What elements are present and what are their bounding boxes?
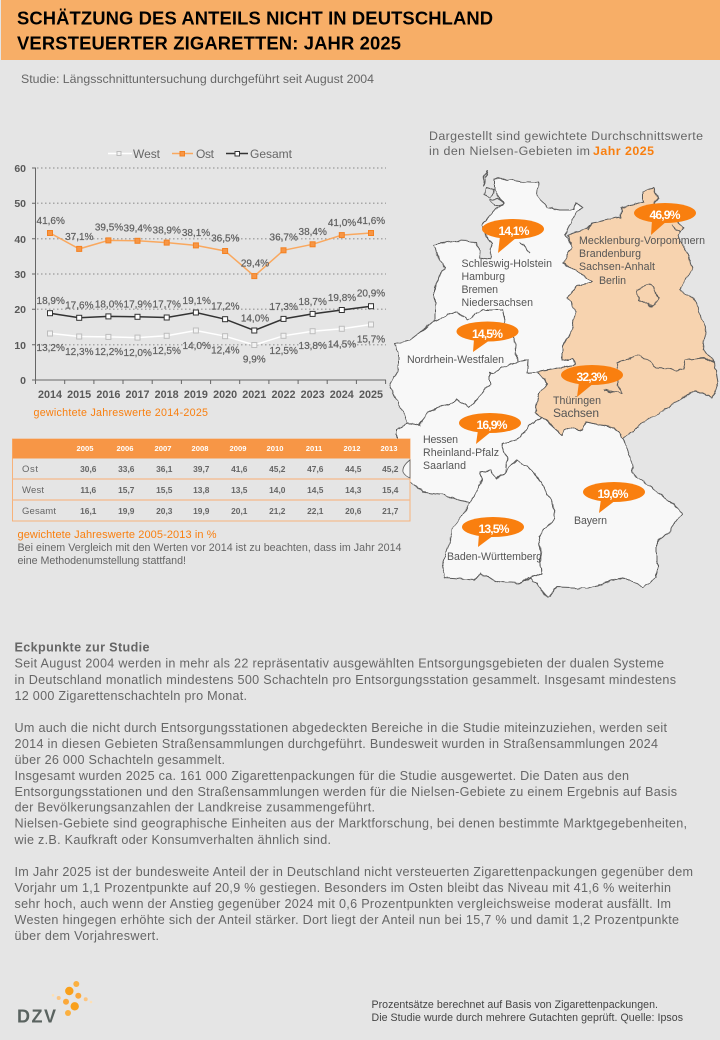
chart axes: 40: [14, 234, 26, 246]
chart axes: 60: [14, 163, 26, 175]
data labels: 20,9%: [357, 289, 385, 300]
data labels: 18,0%: [95, 300, 123, 311]
key points text block: Nielsen-Gebiete sind geographische Einheiten aus der Marktforschung, bei denen bestimmte Marktgegebenheiten,: [14, 817, 687, 831]
chart axes: 0: [20, 375, 26, 387]
title banner: SCHÄTZUNG DES ANTEILS NICHT IN DEUTSCHLAND: [17, 8, 493, 28]
table row: Gesamt: [22, 506, 399, 517]
data labels: 38,9%: [153, 225, 181, 236]
DZV logo: DZV: [17, 1006, 56, 1026]
data labels: 41,6%: [357, 216, 385, 227]
table row: West: [22, 485, 399, 496]
key points text block: Vorjahr um 1,1 Prozentpunkte auf 20,9 % gestiegen. Besonders im Osten bleibt das Niveau mit 41,6 % weiterhin: [14, 881, 671, 895]
table caption and note: [18, 529, 402, 567]
table header: 2010: [267, 444, 283, 453]
table row: Ost: 41,6: [231, 464, 248, 474]
map heading: [429, 129, 703, 158]
key points text block: in Deutschland monatlich mindestens 500 Schachteln pro Entsorgungsstation gesammelt. Insgesamt mindestens: [14, 673, 676, 687]
table row: West: 11,6: [80, 485, 97, 495]
data labels: 39,5%: [95, 223, 123, 234]
chart caption: gewichtete Jahreswerte 2014-2025: [34, 407, 208, 419]
key points text block: über 26 000 Schachteln gesammelt.: [14, 753, 225, 767]
title banner: VERSTEUERTER ZIGARETTEN: JAHR 2025: [17, 32, 401, 54]
callout: 14,1 %: [482, 219, 544, 253]
key points text block: sehr hoch, auch wenn der Anstieg gegenüber 2024 mit 0,6 Prozentpunkten vergleichsweise moderat ausfällt. Im: [14, 897, 671, 911]
table row: Ost: 45,2: [382, 464, 399, 474]
region: Baden-Württemberg: [442, 460, 555, 583]
data labels: 17,3%: [270, 302, 298, 313]
chart legend: [108, 147, 293, 161]
key points text block: Eckpunkte zur Studie: [14, 641, 150, 655]
key points text block: Seit August 2004 werden in mehr als 22 repräsentativ ausgewählten Entsorgungsgebieten der dualen Systeme: [14, 657, 664, 671]
table row: Gesamt: Gesamt: [22, 506, 56, 517]
data labels: 14,5%: [328, 339, 356, 350]
series: West: [48, 322, 374, 348]
table row: Gesamt: 21,7: [382, 506, 399, 516]
callout: 14,5 %: [456, 322, 518, 352]
data labels: 19,8%: [328, 293, 356, 304]
data labels: 17,7%: [153, 300, 181, 311]
table header: 2008: [192, 444, 208, 453]
table row: Ost: Ost: [22, 464, 38, 475]
callout: 13,5 %: 13,5%: [478, 522, 510, 536]
key points text block: 2014 in diesen Gebieten Straßensammlungen durchgeführt. Bundesweit wurden in Straßensammlungen 2024: [14, 737, 658, 751]
chart axes: 2015: [67, 389, 91, 401]
table header: 2007: [155, 444, 171, 453]
table row: Ost: 30,6: [80, 464, 97, 474]
callout: 46,9 %: 46,9%: [650, 208, 681, 222]
subtitle: Studie: Längsschnittuntersuchung durchgeführt seit August 2004: [21, 72, 374, 86]
data labels: 9,9%: [243, 355, 266, 366]
callout: 46,9 %: [634, 203, 696, 235]
data labels: 17,6%: [65, 301, 94, 312]
series: Gesamt: [48, 304, 374, 333]
chart axes: 2024: [330, 389, 354, 401]
chart legend: Gesamt: [250, 147, 293, 161]
data labels: [37, 216, 385, 366]
table header: 2005: [77, 444, 94, 453]
table row: Gesamt: 20,6: [345, 506, 362, 516]
table row: West: 13,5: [231, 485, 248, 495]
callout: 16,9 %: 16,9%: [476, 418, 508, 432]
data labels: 17,2%: [211, 302, 240, 313]
key points text block: über dem Vorjahreswert.: [14, 929, 159, 943]
data labels: 12,5%: [270, 346, 298, 357]
table row: Ost: 33,6: [118, 464, 135, 474]
data labels: 12,3%: [65, 347, 94, 358]
map region labels: Sachsen: [553, 406, 599, 420]
data labels: 38,1%: [182, 228, 210, 239]
region: Nordrhein-Westfalen: [390, 310, 517, 425]
table row: West: 13,8: [193, 485, 210, 495]
table row: Gesamt: 20,3: [156, 506, 173, 516]
region: Hessen, Rheinland-Pfalz, Saarland: [397, 360, 547, 503]
table: yearly values 2005-2013: [12, 439, 410, 521]
chart axes: 2020: [213, 389, 237, 401]
table row: Gesamt: 21,2: [269, 506, 286, 516]
data labels: 15,7%: [357, 335, 385, 346]
series: Ost: [48, 230, 374, 279]
key points text block: Im Jahr 2025 ist der bundesweite Anteil der in Deutschland nicht versteuerten Zigarettenpackungen gegenüber dem: [14, 865, 693, 879]
table row: West: 14,3: [345, 485, 362, 495]
chart axes: 2017: [125, 389, 150, 401]
data labels: 39,4%: [124, 224, 152, 235]
map region labels: Thüringen: [553, 395, 601, 407]
map region labels: Rheinland-Pfalz: [423, 447, 499, 459]
callout: 19,6 %: 19,6%: [598, 487, 629, 501]
data labels: 38,4%: [299, 227, 327, 238]
data labels: 36,7%: [270, 233, 298, 244]
callout: 14,1 %: 14,1%: [498, 224, 530, 238]
chart axes: 2019: [184, 389, 208, 401]
key points text block: Um auch die nicht durch Entsorgungsstationen abgedeckten Bereiche in die Studie miteinzuziehen, werden seit: [14, 721, 668, 735]
table row: Ost: [22, 464, 399, 475]
map region labels: Sachsen-Anhalt: [579, 261, 655, 273]
chart axes: 30: [14, 269, 26, 281]
callout: 13,5 %: [462, 517, 524, 547]
data labels: 17,9%: [124, 300, 152, 311]
data labels: 36,5%: [211, 234, 240, 245]
key points text block: der Bevölkerungsanzahlen der Landkreise zusammengeführt.: [14, 801, 375, 815]
data labels: 41,6%: [37, 216, 65, 227]
key points text block: Entsorgungsstationen und den Straßensammlungen werden für die Nielsen-Gebiete zu einem Ergebnis auf Basis: [14, 785, 677, 799]
table header: 2012: [344, 444, 360, 453]
key points text block: Insgesamt wurden 2025 ca. 161 000 Zigarettenpackungen für die Studie ausgewertet. Die Daten aus den: [14, 769, 629, 783]
table row: West: 15,7: [118, 485, 135, 495]
chart axes: 2018: [155, 389, 179, 401]
key points text block: Westen hingegen erhöhte sich der Anteil stärker. Dort liegt der Anteil nun bei 15,7 % und damit 1,2 Prozentpunkte: [14, 913, 679, 927]
source note: Die Studie wurde durch mehrere Gutachten geprüft. Quelle: Ipsos: [372, 1012, 683, 1024]
callout: 32,3 %: [561, 365, 623, 397]
key points text block: 12 000 Zigarettenschachteln pro Monat.: [14, 689, 247, 703]
table row: Ost: 39,7: [193, 464, 210, 474]
map region labels: Berlin: [599, 275, 626, 287]
table row: Gesamt: 20,1: [231, 506, 248, 516]
map of Germany: [390, 170, 718, 597]
data labels: 41,0%: [328, 218, 356, 229]
chart axes: 2016: [96, 389, 120, 401]
table row: Ost: 45,2: [269, 464, 286, 474]
callout: 32,3 %: 32,3%: [576, 370, 608, 384]
table row: West: 15,4: [382, 485, 399, 495]
map heading: Dargestellt sind gewichtete Durchschnittswerte: [429, 129, 703, 143]
map region labels: Saarland: [423, 460, 466, 472]
map region labels: Baden-Württemberg: [447, 551, 542, 563]
table header: 2009: [230, 444, 246, 453]
chart axes: 2021: [242, 389, 266, 401]
map region labels: Hessen: [423, 434, 458, 446]
data labels: 18,7%: [299, 297, 327, 308]
chart axes: 2025: [359, 389, 383, 401]
data labels: 12,4%: [211, 346, 240, 357]
key points text block: [14, 641, 693, 943]
region: Bayern: [502, 417, 682, 597]
callout: 19,6 %: [583, 482, 645, 513]
table row: Ost: 47,6: [307, 464, 324, 474]
callout: 14,5 %: 14,5%: [472, 327, 503, 341]
table row: Ost: 44,5: [345, 464, 362, 474]
table caption and note: Bei einem Vergleich mit den Werten vor 2014 ist zu beachten, dass im Jahr 2014: [18, 542, 402, 554]
table header: 2011: [306, 444, 323, 453]
chart legend: West: [133, 147, 161, 161]
map region labels: [407, 235, 705, 563]
region: Ostdeutschland: [535, 188, 718, 438]
source note: Prozentsätze berechnet auf Basis von Zigarettenpackungen.: [372, 999, 658, 1011]
chart axes: 10: [14, 340, 26, 352]
table caption and note: gewichtete Jahreswerte 2005-2013 in %: [18, 529, 217, 541]
table row: West: West: [22, 485, 44, 496]
data labels: 37,1%: [65, 232, 94, 243]
table row: Gesamt: 22,1: [307, 506, 324, 516]
chart axes: 2023: [301, 389, 325, 401]
table row: Gesamt: 16,1: [80, 506, 97, 516]
line chart: [14, 147, 386, 401]
map region labels: Mecklenburg-Vorpommern: [579, 235, 705, 247]
data labels: 29,4%: [241, 259, 269, 270]
chart axes: 2022: [271, 389, 296, 401]
chart legend: Ost: [196, 147, 215, 161]
source note: [372, 999, 683, 1024]
map region labels: Schleswig-Holstein: [462, 258, 552, 270]
chart axes: 20: [14, 304, 26, 316]
map region labels: Niedersachsen: [462, 297, 533, 309]
DZV logo: [17, 981, 92, 1026]
chart axes: 50: [14, 198, 26, 210]
data labels: 12,0%: [124, 348, 152, 359]
data labels: 18,9%: [37, 296, 65, 307]
table header: [77, 444, 397, 453]
table row: West: 14,0: [269, 485, 286, 495]
map region labels: Bremen: [462, 284, 498, 296]
table row: Gesamt: 19,9: [118, 506, 135, 516]
table caption and note: eine Methodenumstellung stattfand!: [18, 555, 186, 567]
table row: West: 15,5: [156, 485, 173, 495]
map heading: Jahr 2025: [593, 144, 654, 158]
table header: 2006: [117, 444, 133, 453]
table row: Ost: 36,1: [156, 464, 173, 474]
map region labels: Hamburg: [462, 271, 505, 283]
map heading: in den Nielsen-Gebieten im: [429, 144, 590, 158]
map region labels: Bayern: [574, 515, 607, 527]
chart axes: 2014: [38, 389, 62, 401]
data labels: 13,8%: [299, 341, 327, 352]
data labels: 14,0%: [183, 341, 211, 352]
region: Schleswig-Holstein, Hamburg, Bremen, Niedersachsen: [433, 170, 593, 373]
map region labels: Brandenburg: [579, 248, 641, 260]
key points text block: wie z.B. Kaufkraft oder Konsumverhalten ähnlich sind.: [14, 833, 331, 847]
data labels: 19,1%: [183, 296, 211, 307]
chart axes: [14, 163, 386, 401]
table row: West: 14,5: [307, 485, 324, 495]
data labels: 14,0%: [241, 314, 269, 325]
data labels: 12,2%: [95, 347, 123, 358]
data labels: 13,2%: [37, 343, 65, 354]
title banner: [1, 0, 720, 60]
data labels: 12,5%: [153, 346, 181, 357]
callout: 16,9 %: [459, 413, 521, 444]
table header: 2013: [381, 444, 397, 453]
table row: Gesamt: 19,9: [193, 506, 210, 516]
map region labels: Nordrhein-Westfalen: [407, 354, 504, 366]
